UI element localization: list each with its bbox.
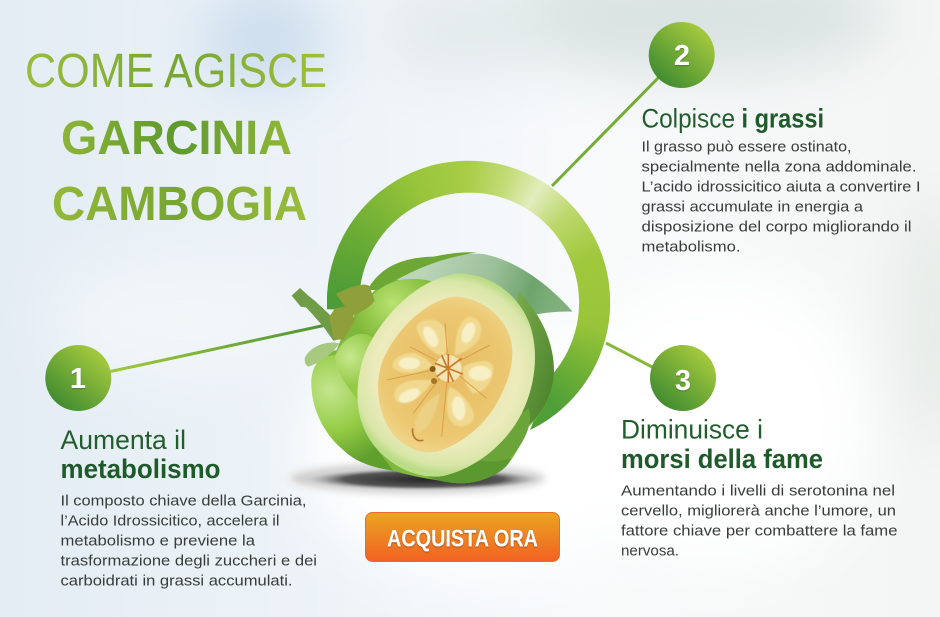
fruit shadow	[287, 458, 553, 498]
cross-section rim	[357, 273, 535, 477]
heading 1: metabolismo	[60, 454, 220, 484]
body text 1: l’Acido Idrossicitico, accelera il	[60, 512, 280, 530]
number badge 3: 3	[675, 365, 691, 397]
body text 2: Il grasso può essere ostinato,	[642, 138, 852, 156]
heading 2: i grassi	[742, 104, 824, 134]
fruit core	[430, 354, 463, 384]
fruit illustration	[292, 252, 573, 483]
number badge 3	[650, 345, 716, 411]
body text 2	[642, 138, 920, 256]
number badge 2	[649, 22, 715, 88]
button: acquista ora: ACQUISTA ORA	[387, 526, 538, 552]
body text 2: metabolismo.	[642, 238, 740, 256]
body text 3: nervosa.	[621, 542, 679, 560]
body text 1: trasformazione degli zuccheri e dei	[60, 552, 317, 570]
seed scar	[413, 428, 423, 441]
title: GARCINIA	[61, 112, 292, 165]
heading 3	[621, 414, 823, 474]
heading 3: Diminuisce i	[621, 414, 763, 444]
body text 2: specialmente nella zona addominale.	[642, 158, 916, 176]
body text 1: carboidrati in grassi accumulati.	[60, 572, 292, 590]
body text 2: L’acido idrossicitico aiuta a convertire I	[642, 178, 920, 196]
fruit bottom lobe	[422, 458, 511, 483]
calyx	[329, 285, 375, 340]
fruit upper lobe	[354, 279, 433, 337]
connector line 1	[108, 325, 326, 372]
heading 1: Aumenta il	[60, 425, 186, 455]
fruit middle lobe	[335, 334, 373, 401]
sepal	[305, 342, 339, 367]
panel: step 1	[60, 425, 317, 590]
panel: step 2	[642, 104, 920, 256]
title	[25, 45, 327, 231]
fruit top lobe	[367, 252, 477, 290]
fruit body	[312, 269, 554, 483]
body text 3	[621, 482, 898, 560]
body text 2: grassi accumulate in energia a	[642, 198, 864, 216]
button: acquista ora	[366, 512, 560, 562]
number badge 1: 1	[70, 363, 86, 395]
panel: step 3	[621, 414, 898, 560]
heading 2: Colpisce	[642, 104, 735, 134]
ring	[327, 160, 611, 444]
fruit back right lobe	[510, 292, 554, 425]
connector line 2	[552, 76, 660, 186]
heading 1	[60, 425, 220, 484]
fruit bottom right lobe	[468, 408, 530, 463]
segment membranes	[387, 323, 490, 437]
title: CAMBOGIA	[52, 178, 307, 231]
heading 2	[642, 104, 824, 134]
fruit leaf	[395, 254, 573, 314]
body text 3: cervello, migliorerà anche l’umore, un	[621, 502, 896, 520]
heading 3: morsi della fame	[621, 444, 823, 474]
fruit left lobe	[311, 355, 393, 471]
body text 1: Il composto chiave della Garcinia,	[60, 492, 306, 510]
cross-section flesh	[378, 297, 512, 452]
number badge 1	[45, 345, 111, 411]
connector line 3	[606, 343, 656, 369]
body text 1: metabolismo e previene la	[60, 532, 256, 550]
body text 2: disposizione del corpo migliorando il	[642, 218, 912, 236]
fruit segments	[393, 317, 493, 433]
body text 3: fattore chiave per combattere la fame	[621, 522, 898, 540]
title: COME AGISCE	[25, 45, 327, 98]
body text 1	[60, 492, 317, 590]
number badge 2: 2	[674, 40, 690, 72]
stem	[292, 288, 344, 341]
body text 3: Aumentando i livelli di serotonina nel	[621, 482, 895, 500]
